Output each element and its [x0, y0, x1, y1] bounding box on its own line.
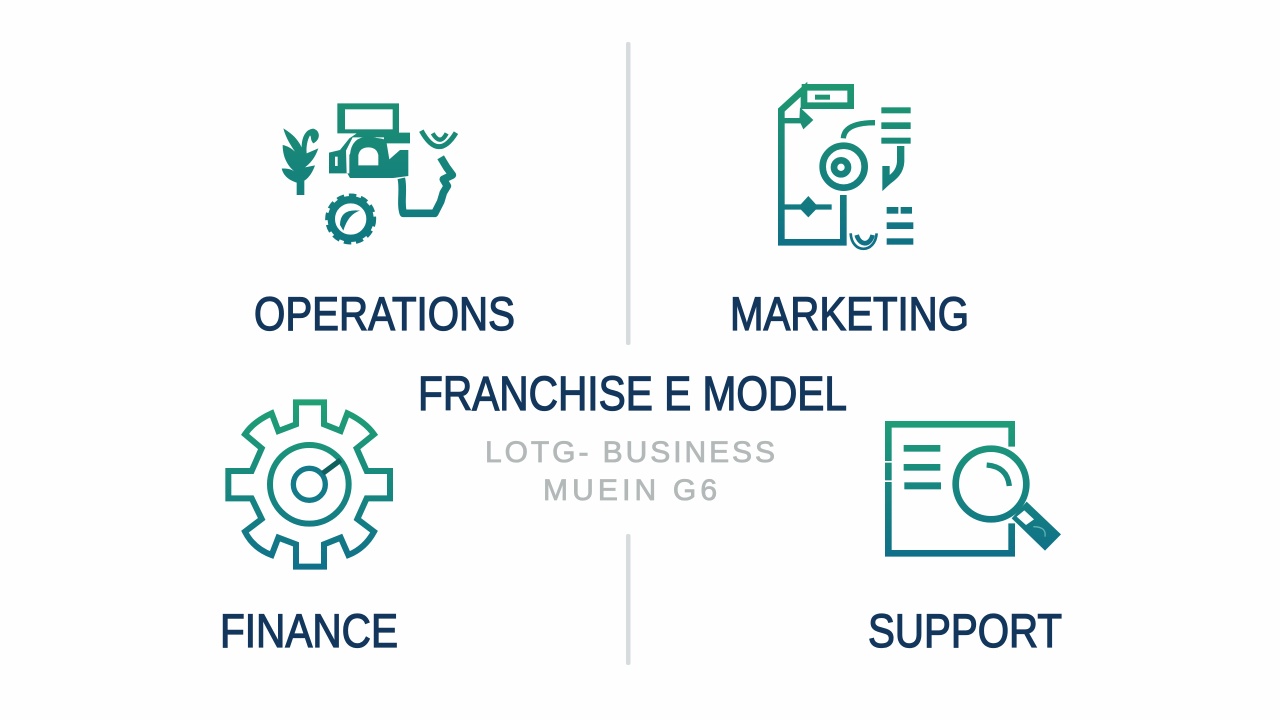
head profile [401, 157, 452, 213]
label: finance: FINANCE [220, 604, 398, 657]
label: marketing: MARKETING [730, 287, 969, 340]
icon: document with magnifier [885, 424, 1061, 553]
small gear [331, 200, 370, 238]
panel: operations [254, 103, 515, 340]
subtitle: MUEIN G6 [543, 474, 717, 507]
signal arcs [421, 131, 456, 147]
center title block [418, 368, 847, 507]
label: support: SUPPORT [868, 604, 1062, 657]
title: FRANCHISE E MODEL [418, 368, 847, 421]
panel: support [868, 424, 1062, 657]
subtitle [485, 436, 775, 507]
panel: marketing [730, 87, 969, 340]
lower vertical divider [626, 534, 630, 665]
upper vertical divider [626, 42, 630, 345]
panel: finance [220, 402, 398, 657]
icon: document and target [781, 87, 913, 249]
label: operations: OPERATIONS [254, 287, 515, 340]
subtitle: LOTG- BUSINESS [485, 436, 775, 469]
icon: gear with target [228, 402, 390, 567]
icon: operations cluster [282, 103, 456, 242]
arch outline [354, 141, 383, 174]
